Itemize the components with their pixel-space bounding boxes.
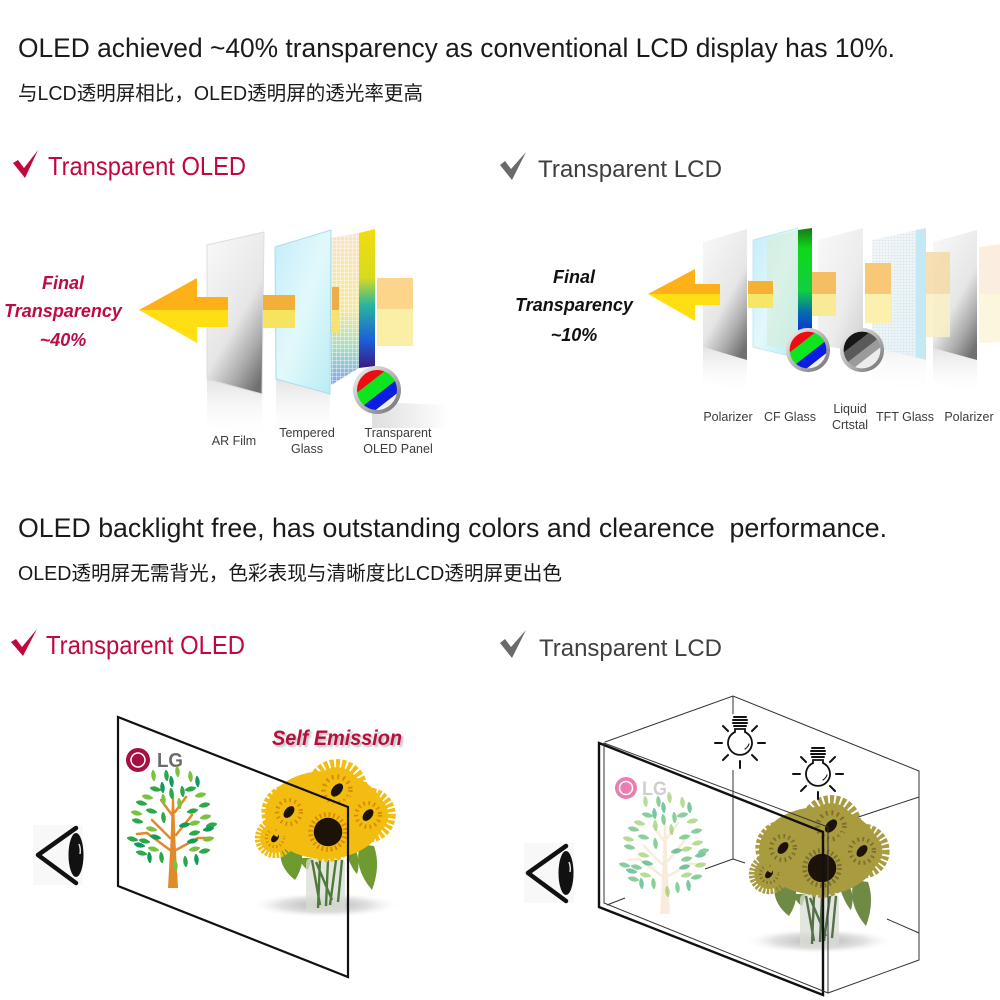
label: final transparency 10%: Transparency — [515, 295, 634, 315]
layer labels: TFT Glass — [876, 410, 934, 424]
check mark: gray — [500, 630, 526, 658]
back light beam — [979, 244, 1000, 343]
logo: LG faded — [615, 777, 667, 800]
layer labels: Glass — [291, 442, 323, 456]
layer labels: Tempered — [279, 426, 335, 440]
label: final transparency 40%: Final — [42, 273, 85, 293]
check mark: gray — [500, 152, 526, 180]
panel: OLED self emission — [11, 629, 402, 977]
light beam — [748, 281, 773, 308]
illustration: dim sunflower bouquet — [743, 800, 895, 954]
layer labels — [212, 426, 433, 456]
label: final transparency 10%: Final — [553, 267, 596, 287]
AR film layer — [207, 232, 264, 394]
layer labels: AR Film — [212, 434, 256, 448]
polarizer layer back — [933, 230, 977, 360]
rear light beam — [377, 278, 413, 346]
light beam over polarizer — [926, 252, 950, 337]
layer labels: Crtstal — [832, 418, 868, 432]
arrow: output light — [648, 269, 720, 321]
layer labels: CF Glass — [764, 410, 816, 424]
layered stack diagram — [139, 229, 450, 440]
light beams mid — [812, 263, 891, 323]
polarizer layer front — [703, 229, 747, 360]
icon: RGB sub-pixel lens — [342, 355, 412, 425]
label: final transparency 10% — [515, 267, 634, 345]
tempered glass layer — [275, 230, 331, 394]
icon: eye — [33, 825, 84, 885]
label: final transparency 40% — [4, 273, 123, 350]
layer labels: Polarizer — [944, 410, 994, 424]
transparent screen outline — [118, 717, 348, 977]
heading: Transparent LCD: Transparent LCD — [538, 156, 722, 183]
icon: RGB lens — [776, 318, 840, 382]
layer labels: Liquid — [833, 402, 867, 416]
LCD screen outline — [599, 743, 828, 995]
layer labels: Polarizer — [703, 410, 753, 424]
icon: liquid crystal lens — [830, 318, 894, 382]
arrow: output light — [139, 278, 228, 343]
label: final transparency 10%: ~10% — [551, 325, 597, 345]
icon: bulb left — [715, 717, 765, 768]
panel: transparent LCD layers — [500, 152, 1000, 432]
heading: backlight free: OLED backlight free, has outstanding colors and clearence performance. — [18, 513, 887, 543]
logo: LG faded: LG — [642, 779, 667, 800]
layer labels: OLED Panel — [363, 442, 433, 456]
label: final transparency 40%: Transparency — [4, 301, 123, 321]
subheading: Chinese transparency note: 与LCD透明屏相比，OLED透明屏的透光率更高 — [18, 82, 423, 105]
layer labels — [703, 402, 994, 432]
subheading: Chinese backlight note: OLED透明屏无需背光，色彩表现与清晰度比LCD透明屏更出色 — [18, 562, 562, 585]
heading: transparency comparison: OLED achieved ~40% transparency as conventional LCD display has 10%. — [18, 33, 895, 63]
layer labels: Transparent — [365, 426, 432, 440]
check mark: red — [11, 629, 37, 656]
light beam between layers — [263, 295, 295, 328]
check mark: red — [13, 150, 38, 178]
logo: LG: LG — [157, 750, 183, 772]
illustration: dim tree — [620, 793, 708, 914]
label: self emission: Self Emission — [272, 727, 402, 750]
panel: transparent OLED layers — [4, 150, 450, 456]
TFT glass layer — [872, 228, 926, 360]
liquid crystal layer — [818, 228, 863, 352]
icon: eye — [524, 843, 574, 903]
illustration: sunflower bouquet — [249, 764, 401, 918]
OLED panel layer — [331, 229, 375, 385]
illustration: tree on screen — [128, 767, 216, 888]
icon: bulb right — [793, 748, 843, 799]
heading: Transparent LCD: Transparent LCD — [539, 635, 722, 662]
layered stack diagram — [648, 228, 1000, 395]
heading: Transparent OLED: Transparent OLED — [48, 151, 246, 181]
CF glass layer — [753, 228, 812, 358]
backlight box wireframe — [605, 696, 919, 993]
logo: LG — [126, 748, 183, 772]
panel: LCD backlit box — [500, 630, 919, 995]
label: final transparency 40%: ~40% — [40, 330, 86, 350]
heading: Transparent OLED: Transparent OLED — [46, 630, 245, 660]
